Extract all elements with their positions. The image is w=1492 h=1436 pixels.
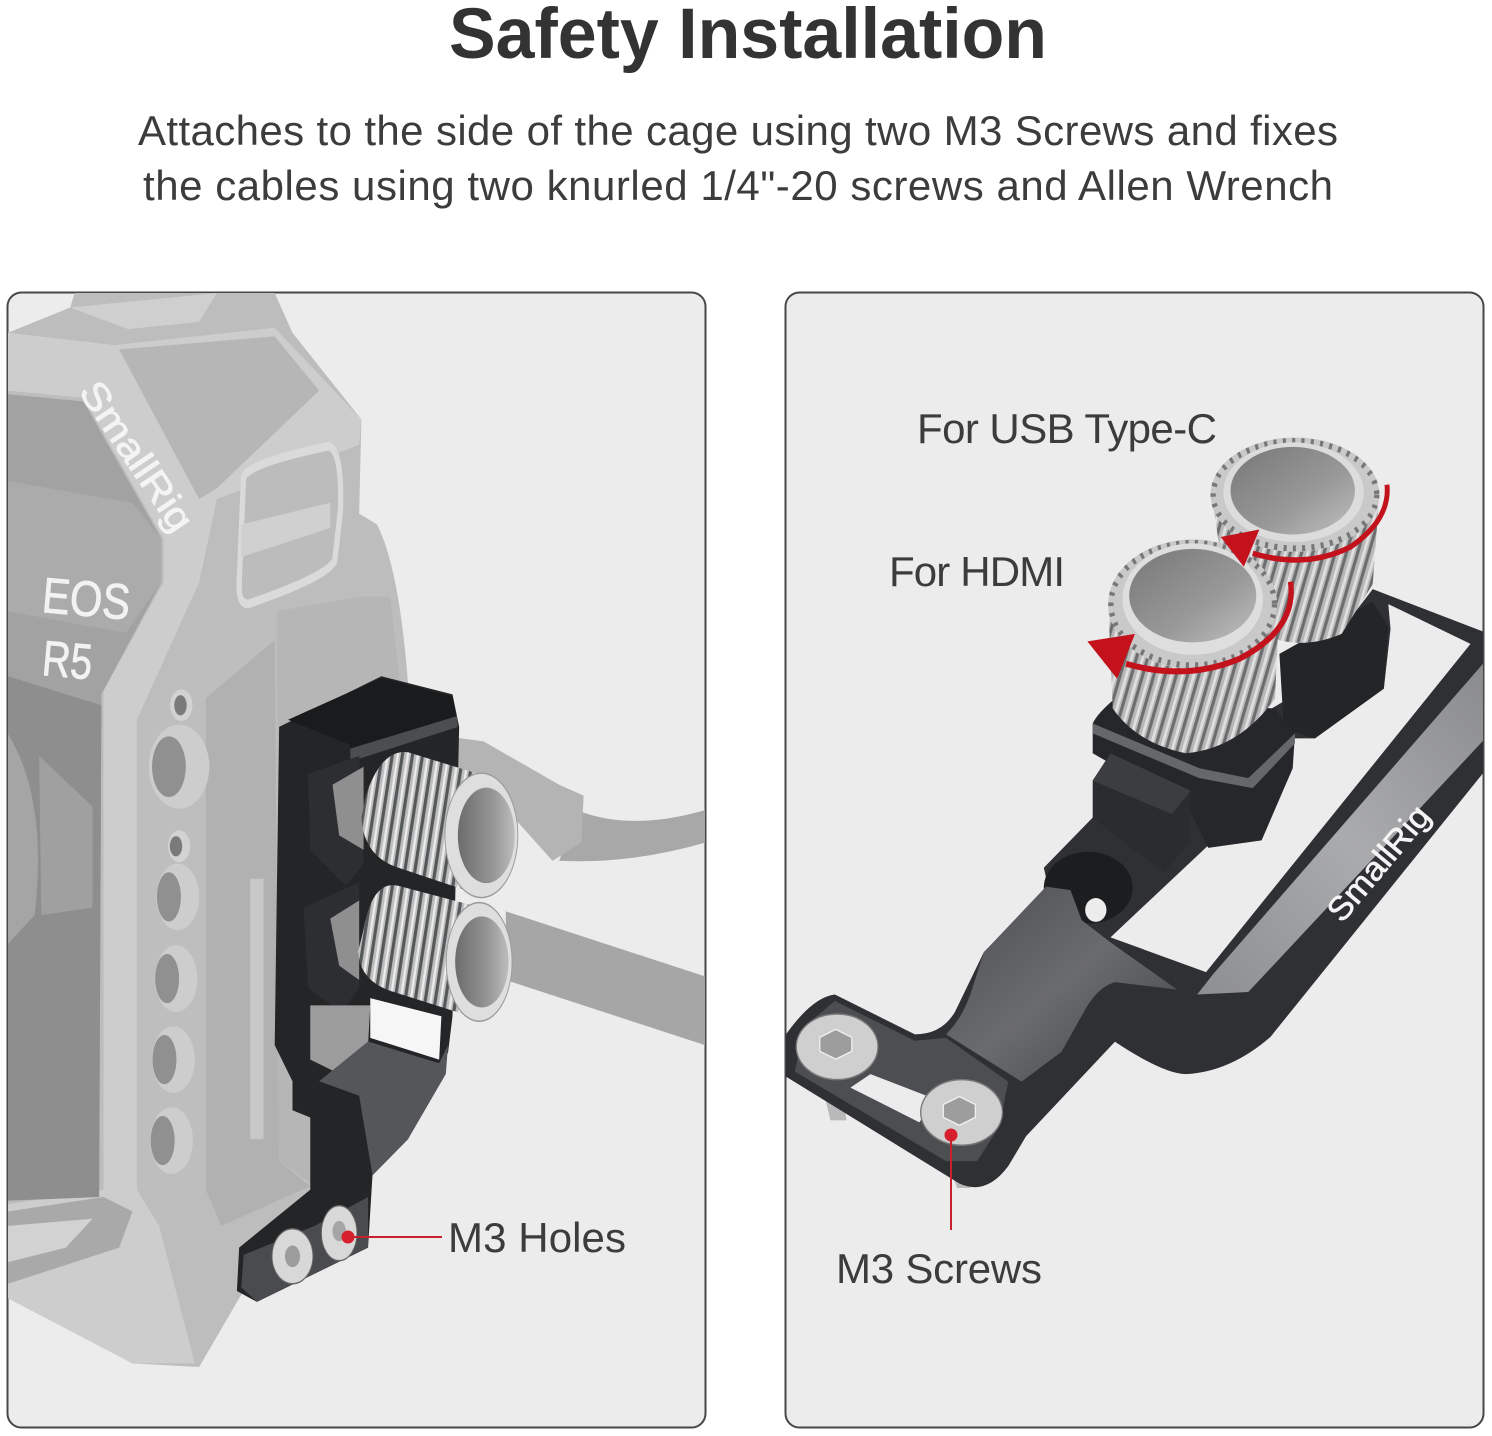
- arrow: rotate HDMI knob: [1087, 582, 1291, 679]
- callout: M3 Holes: [342, 1214, 626, 1261]
- cable clamp bracket: [237, 676, 459, 1302]
- arrow: rotate USB Type-C knob: [1221, 485, 1387, 567]
- EOS R5 text: R5: [40, 630, 95, 690]
- M3 screws on left bracket: [272, 1206, 357, 1284]
- rear clamp block: [1279, 602, 1388, 738]
- knurled knob: lower: [358, 885, 512, 1021]
- subtitle: [138, 107, 1338, 209]
- M3 screws: [796, 1014, 1002, 1145]
- panel: right, bracket detail: [786, 292, 1484, 1428]
- panel: left, cage mounted on camera: [8, 292, 706, 1428]
- metal bracket: [786, 589, 1483, 1188]
- top hot shoe: [70, 293, 217, 329]
- subtitle: the cables using two knurled 1/4"-20 screws and Allen Wrench: [143, 162, 1333, 209]
- callout: M3 Holes: M3 Holes: [448, 1214, 626, 1261]
- camera front panel: [8, 394, 161, 1201]
- camera body in cage: [8, 293, 408, 1367]
- left rail: [137, 633, 310, 1226]
- cage brand text: SmallRig: [71, 374, 202, 540]
- viewfinder window: [239, 446, 341, 604]
- cage bottom: [8, 1197, 132, 1284]
- cables: [458, 738, 705, 1046]
- label: For USB Type-C: For USB Type-C: [917, 405, 1217, 452]
- brand text on bracket: SmallRig: [1319, 797, 1437, 928]
- frame top band: [8, 328, 361, 1363]
- knurled knob: HDMI: [1108, 539, 1279, 753]
- label: For HDMI: For HDMI: [889, 548, 1065, 595]
- EOS R5 text: EOS: [40, 567, 133, 631]
- mounting holes: [149, 689, 209, 1174]
- front clamp block: [1092, 700, 1295, 848]
- EOS R5 text: [44, 578, 129, 680]
- knurled knob: USB Type-C: [1210, 437, 1379, 643]
- top right facet: [119, 336, 319, 499]
- callout: M3 Screws: M3 Screws: [836, 1245, 1042, 1292]
- callout: M3 Screws: [836, 1128, 1042, 1292]
- knurled knob: upper: [361, 752, 518, 898]
- subtitle: Attaches to the side of the cage using two M3 Screws and fixes: [138, 107, 1338, 154]
